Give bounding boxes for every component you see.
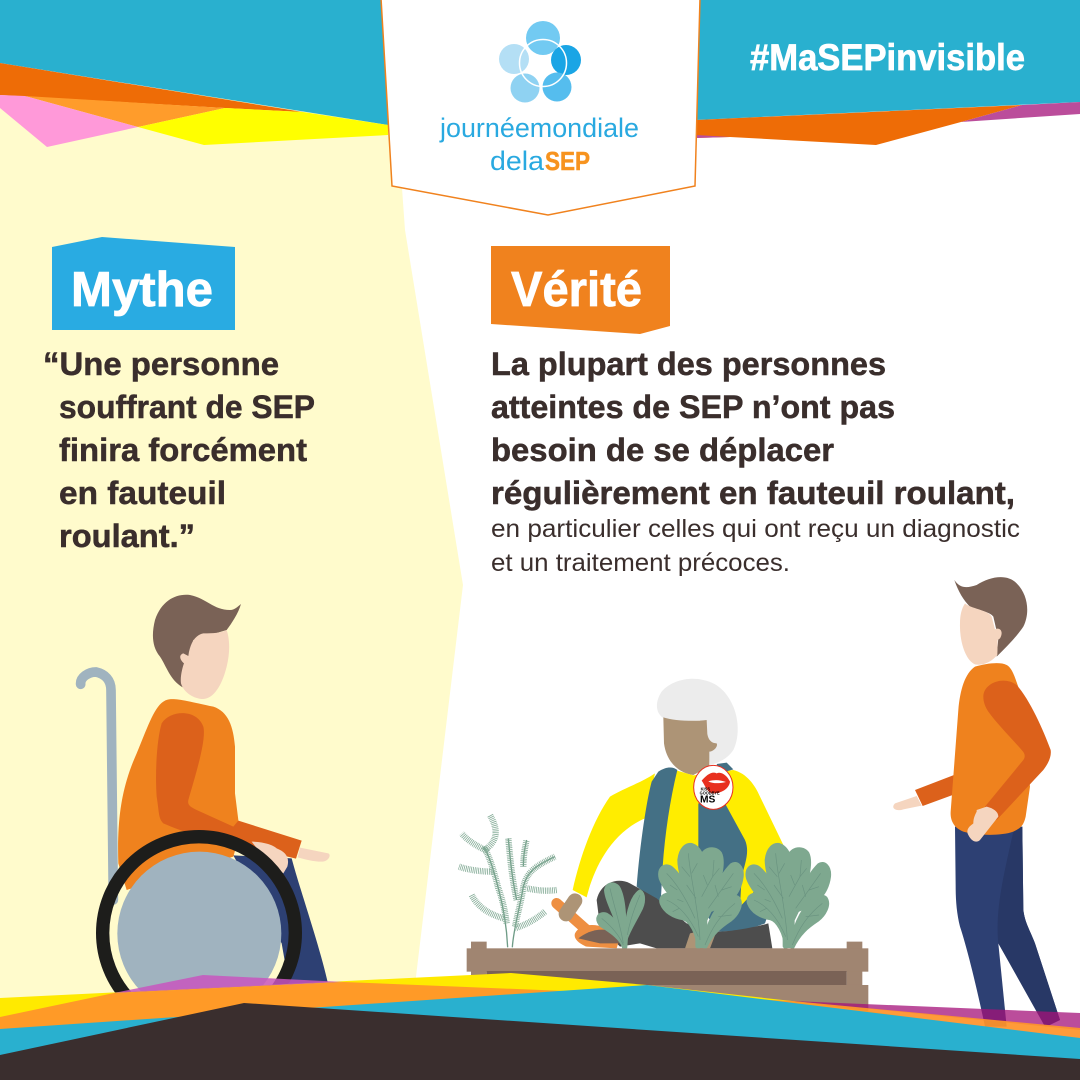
rear hand [893, 796, 922, 810]
truth bold text: besoin de se déplacer [491, 432, 834, 468]
top banner shapes [0, 0, 1080, 147]
myth quote text: “Une personne [43, 346, 279, 382]
forearm hand [298, 848, 330, 862]
icon: overlapping circles [499, 21, 581, 102]
campaign badge [694, 765, 733, 809]
truth bold text: La plupart des personnes [491, 346, 886, 382]
wheel tyre [103, 837, 295, 1029]
sweater sleeve [983, 681, 1051, 820]
plant: large leaves 1 [660, 845, 742, 947]
hair [153, 595, 241, 687]
badge: Mythe: Mythe [71, 263, 213, 317]
knee patch [685, 927, 718, 948]
badge: Vérité [491, 246, 670, 334]
figure: man in wheelchair [81, 595, 347, 1029]
cream background panel: myth side [0, 90, 463, 1080]
hand on wheel [252, 842, 288, 873]
myth quote text: roulant.” [59, 518, 195, 554]
face [663, 717, 717, 775]
sweater [118, 699, 240, 890]
hair [657, 679, 738, 765]
vest left strap [637, 767, 677, 903]
logo wordmark line 2: dela [490, 146, 545, 176]
myth quote text: finira forcément [59, 432, 307, 468]
wheelchair handle [81, 672, 113, 900]
plant: small leaves [598, 884, 644, 947]
wooden planter [467, 942, 868, 1013]
truth bold text: régulièrement en fauteuil roulant, [491, 475, 1015, 511]
logo: world MS day [439, 21, 639, 176]
hand in pocket [967, 807, 998, 842]
plant: large leaves 2 [748, 845, 829, 947]
campaign badge: KISS [701, 787, 710, 792]
sweater [951, 663, 1030, 835]
trousers front leg [955, 827, 1060, 1027]
badge: Mythe [52, 237, 235, 330]
campaign badge: GOODBYE [700, 791, 720, 796]
logo wordmark line 1: journéemondiale [439, 113, 639, 143]
myth quote text: en fauteuil [59, 475, 226, 511]
yellow torso [662, 770, 785, 907]
myth quote text [43, 346, 315, 554]
plant: fern [459, 815, 557, 947]
myth quote text: souffrant de SEP [59, 389, 315, 425]
hand [566, 901, 575, 914]
vest right [698, 803, 775, 932]
truth bold text: atteintes de SEP n’ont pas [491, 389, 895, 425]
trowel [557, 903, 622, 948]
hashtag: #MaSEPinvisible [750, 37, 1025, 78]
face [180, 630, 229, 699]
truth bold text [491, 346, 1015, 511]
trousers rear leg [998, 827, 1060, 1027]
yellow arm [573, 773, 655, 897]
face [960, 603, 1002, 665]
vest collar [717, 763, 733, 773]
trousers [597, 881, 772, 948]
white logo panel [381, 0, 700, 215]
hair [954, 577, 1027, 657]
sweater sleeve [156, 713, 302, 859]
figure: standing man [893, 577, 1060, 1027]
trousers [233, 855, 347, 1010]
truth detail text: en particulier celles qui ont reçu un diagnostic [491, 515, 1020, 543]
truth detail text [491, 515, 1020, 577]
figure: gardener with planter [459, 679, 868, 1013]
campaign badge: MS [700, 795, 716, 806]
logo wordmark SEP: SEP [545, 146, 590, 176]
truth detail text: et un traitement précoces. [491, 549, 790, 577]
bottom banner shapes [0, 973, 1080, 1080]
badge: Vérité: Vérité [511, 263, 642, 317]
rear forearm [915, 775, 954, 806]
wheel disc [117, 852, 281, 1016]
